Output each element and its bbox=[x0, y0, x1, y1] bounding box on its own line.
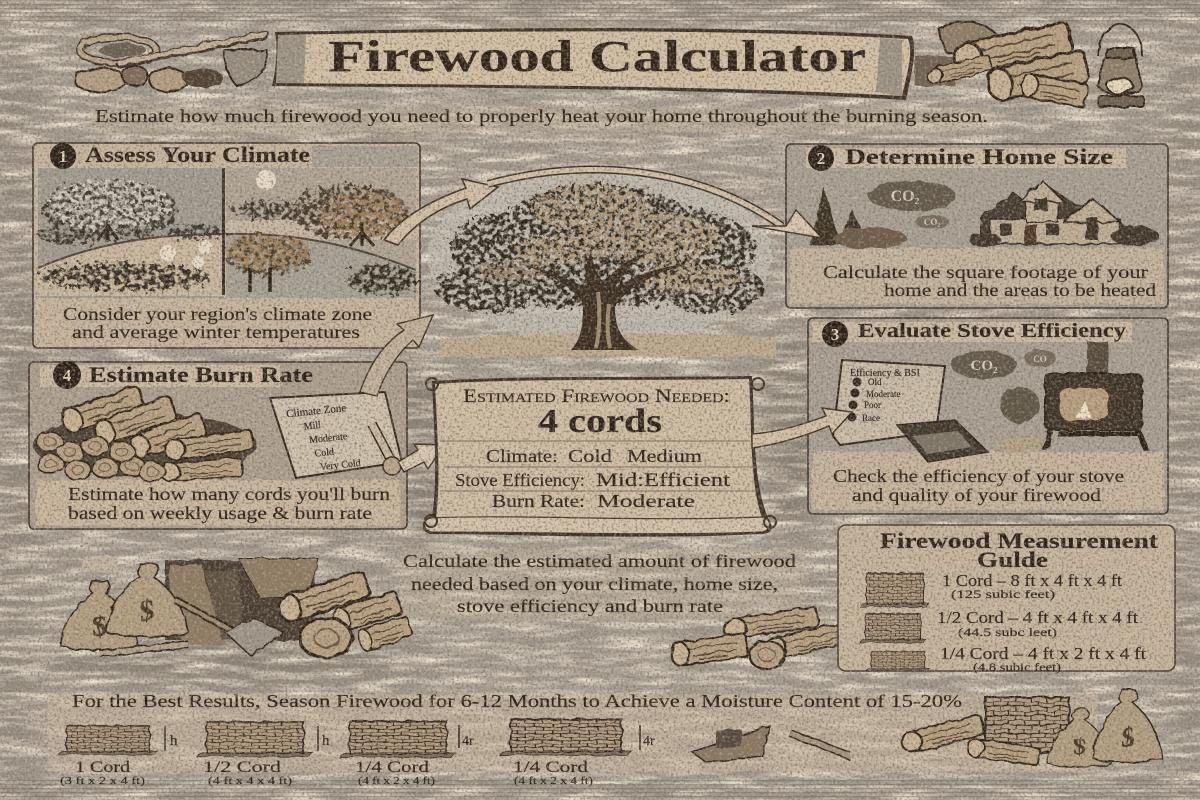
arrow: burn rate up to tree bbox=[360, 315, 433, 396]
body text: and average winter temperatures bbox=[72, 322, 360, 342]
heading with number badge bbox=[808, 144, 1113, 171]
footer: cord size 1/4 second: 4r bbox=[643, 734, 655, 749]
illustration: efficiency checklist and calculator: Efficiency & BSI bbox=[850, 368, 920, 379]
footer: cord size 1/4 second bbox=[499, 719, 655, 787]
guide title: Gulde bbox=[977, 547, 1048, 572]
body text: Check the efficiency of your stove bbox=[833, 466, 1124, 486]
heading with number badge: Assess Your Climate bbox=[85, 142, 310, 167]
row: 1 cord bbox=[860, 571, 1122, 607]
footer: cord size 1: (3 ft x 2 x 4 ft) bbox=[60, 775, 145, 787]
footer: cord size 1/2: 1/2 Cord bbox=[203, 759, 281, 776]
label: estimated firewood needed: Estimated Firewood Needed: bbox=[463, 386, 730, 407]
subtitle: Estimate how much firewood you need to properly heat your home throughout the burning season. bbox=[95, 106, 988, 126]
row: 1 cord: 1 Cord – 8 ft x 4 ft x 4 ft bbox=[942, 571, 1122, 590]
footer tip text: For the Best Results, Season Firewood for 6-12 Months to Achieve a Moisture Content of 15-20% bbox=[72, 691, 962, 711]
footer: cord size 1 bbox=[58, 726, 178, 787]
footer: cord size 1: h bbox=[170, 733, 178, 749]
heading with number badge: 1 bbox=[59, 147, 67, 166]
illustration: logs on ground bbox=[669, 607, 859, 669]
result details: Medium bbox=[627, 446, 702, 466]
footer: cord size 1/4: (4 ft x 2 x 4 ft) bbox=[358, 775, 435, 787]
scene: winter and autumn landscape bbox=[38, 168, 418, 298]
illustration: rope, stones and shovel top left bbox=[74, 34, 267, 92]
illustration: wood stove and CO2 clouds: CO₂ bbox=[970, 358, 998, 374]
panel: 4 estimate burn rate bbox=[29, 361, 407, 529]
footer: cord size 1/4 second: 1/4 Cord bbox=[513, 759, 588, 776]
body text: based on weekly usage & burn rate bbox=[68, 503, 372, 523]
heading with number badge: 4 bbox=[63, 366, 72, 385]
text block: calculation description: stove efficiency and burn rate bbox=[457, 596, 723, 616]
heading with number badge: Estimate Burn Rate bbox=[89, 362, 313, 387]
row: 1 cord: (125 subic feet) bbox=[951, 587, 1055, 601]
body text: Calculate the square footage of your bbox=[823, 262, 1148, 282]
result value: 4 cords bbox=[538, 403, 662, 440]
heading with number badge: 2 bbox=[817, 149, 825, 168]
footer: cord size 1/2: (4 ft x 4 x 4 ft) bbox=[208, 775, 292, 787]
body text: Consider your region's climate zone bbox=[63, 304, 372, 324]
text block: calculation description: Calculate the estimated amount of firewood bbox=[403, 551, 796, 571]
result details: Stove Efficiency: bbox=[455, 470, 585, 490]
row: 1/4 cord: (4.8 subic feet) bbox=[973, 660, 1061, 674]
footer: cord size 1/4: 4r bbox=[462, 734, 474, 749]
illustration: efficiency checklist and calculator bbox=[833, 360, 988, 462]
row: 1/4 cord bbox=[866, 644, 1146, 674]
footer: cord size 1/4 bbox=[339, 721, 474, 787]
footer: cord size 1/2 bbox=[196, 722, 330, 787]
footer: cord size 1/4: 1/4 Cord bbox=[355, 759, 429, 776]
illustration: house, trees and CO2 clouds: CO₂ bbox=[924, 217, 940, 227]
result details: Moderate bbox=[597, 491, 695, 511]
footer: cord size 1/2: h bbox=[322, 733, 330, 749]
body text: Estimate how many cords you'll burn bbox=[68, 484, 390, 504]
illustration: efficiency checklist and calculator: Race bbox=[862, 413, 880, 423]
body text bbox=[833, 466, 1124, 505]
guide title bbox=[880, 528, 1159, 572]
title text: Firewood Calculator bbox=[328, 32, 866, 81]
illustration: log pile and lantern top right bbox=[915, 21, 1144, 107]
arrow: notepad to result scroll bbox=[398, 444, 444, 472]
body text bbox=[823, 262, 1156, 300]
result details: Climate: bbox=[486, 446, 558, 466]
illustration: wood stove and CO2 clouds: CO bbox=[1033, 354, 1047, 364]
illustration: climate zone notepad and thermometer: Moderate bbox=[309, 431, 348, 446]
illustration: climate zone notepad and thermometer: Cold bbox=[314, 447, 335, 460]
heading with number badge bbox=[822, 320, 1126, 347]
illustration: central oak tree bbox=[428, 165, 776, 356]
heading with number badge: Evaluate Stove Efficiency bbox=[858, 320, 1126, 342]
body text: home and the areas to be heated bbox=[884, 280, 1156, 300]
heading with number badge bbox=[53, 361, 313, 389]
illustration: house, trees and CO2 clouds: CO₂ bbox=[891, 188, 920, 205]
illustration: efficiency checklist and calculator: Moderate bbox=[866, 389, 900, 399]
result details: Mid:Efficient bbox=[596, 470, 731, 491]
illustration: footer wood stack and money bags bbox=[900, 690, 1162, 767]
result details bbox=[455, 446, 731, 511]
panel: result scroll bbox=[423, 376, 776, 537]
illustration: climate zone notepad and thermometer bbox=[270, 392, 402, 478]
illustration: money bags, stump, axe and logs bbox=[61, 556, 413, 658]
footer: cord size 1/4 second: (4 ft x 2 x 4 ft) bbox=[514, 775, 593, 787]
row: 1/2 cord bbox=[859, 608, 1138, 642]
title banner bbox=[272, 28, 914, 100]
result details: Cold bbox=[568, 446, 612, 466]
panel: 2 determine home size bbox=[786, 144, 1168, 308]
illustration: climate zone notepad and thermometer: Climate Zone bbox=[286, 402, 347, 420]
illustration: efficiency checklist and calculator: Old bbox=[868, 377, 882, 387]
row: 1/2 cord: (44.5 subc leet) bbox=[958, 625, 1057, 639]
illustration: climate zone notepad and thermometer: Mill bbox=[303, 420, 322, 433]
illustration: house, trees and CO2 clouds bbox=[810, 180, 1159, 249]
body text bbox=[63, 304, 372, 342]
text block: calculation description: needed based on your climate, home size, bbox=[411, 574, 778, 594]
row: 1/2 cord: 1/2 Cord – 4 ft x 4 ft x 4 ft bbox=[937, 608, 1138, 627]
heading with number badge bbox=[50, 142, 310, 169]
arrow: result scroll to stove panel bbox=[752, 408, 852, 448]
result details: Burn Rate: bbox=[492, 491, 585, 511]
illustration: stacked split logs bbox=[33, 386, 257, 482]
heading with number badge: 3 bbox=[831, 325, 839, 344]
body text: and quality of your firewood bbox=[852, 485, 1101, 505]
guide title: Firewood Measurement bbox=[880, 528, 1159, 553]
text block: calculation description bbox=[403, 551, 796, 616]
arrow: climate to tree to home size bbox=[384, 170, 822, 245]
illustration: wood stove and CO2 clouds bbox=[951, 342, 1146, 453]
illustration: climate zone notepad and thermometer: Very Cold bbox=[319, 458, 361, 473]
row: 1/4 cord: 1/4 Cord – 4 ft x 2 ft x 4 ft bbox=[940, 644, 1146, 663]
illustration: efficiency checklist and calculator: Poor bbox=[864, 400, 881, 410]
footer: cord size 1: 1 Cord bbox=[75, 759, 130, 776]
panel: 3 evaluate stove efficiency bbox=[808, 318, 1168, 514]
heading with number badge: Determine Home Size bbox=[845, 144, 1113, 169]
panel: 1 assess your climate bbox=[33, 142, 420, 348]
illustration: footer tools bbox=[692, 726, 850, 762]
body text bbox=[68, 484, 390, 523]
panel: firewood measurement guide bbox=[838, 525, 1175, 674]
